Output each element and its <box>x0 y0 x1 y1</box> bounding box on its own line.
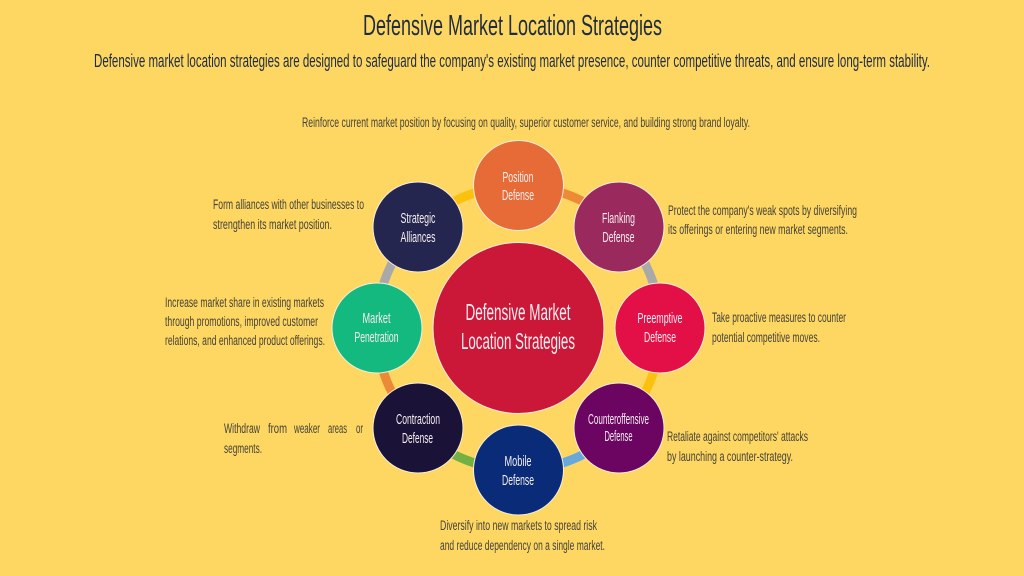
text: Market Penetration description: through promotions, improved customer <box>165 314 318 329</box>
node: Preemptive Defense: Preemptive <box>638 311 682 327</box>
text: Contraction Defense description <box>224 421 363 456</box>
node: Preemptive Defense: Defense <box>644 330 676 346</box>
text: Preemptive Defense description: potential competitive moves. <box>712 330 820 345</box>
node: Market Penetration <box>332 283 422 373</box>
node: Strategic Alliances <box>373 182 463 272</box>
node: Strategic Alliances: Alliances <box>400 230 436 246</box>
text: Contraction Defense description: segments. <box>224 441 262 456</box>
node: Position Defense: Position <box>502 170 534 186</box>
text: Flanking Defense description <box>668 203 857 237</box>
text: Position Defense description: Reinforce current market position by focusing on quality, superior customer service, and building strong brand loyalty. <box>302 115 750 130</box>
text: Counteroffensive Defense description <box>667 429 808 464</box>
text: Counteroffensive Defense description: Retaliate against competitors' attacks <box>667 429 808 444</box>
text: Mobile Defense description <box>440 518 605 553</box>
node: Preemptive Defense <box>615 283 705 373</box>
text: Strategic Alliances description <box>213 197 364 232</box>
text: Preemptive Defense description <box>712 310 846 345</box>
text: Contraction Defense description: areas <box>328 421 347 436</box>
node: Mobile Defense: Mobile <box>504 454 532 470</box>
text: Market Penetration description: Increase market share in existing markets <box>165 295 324 310</box>
node: Contraction Defense: Contraction <box>396 412 440 428</box>
text: Contraction Defense description: Withdraw <box>224 421 260 436</box>
text: Contraction Defense description: or <box>356 421 363 436</box>
text: Flanking Defense description: its offerings or entering new market segments. <box>668 222 848 237</box>
node: Flanking Defense: Flanking <box>602 211 635 227</box>
text: Counteroffensive Defense description: by launching a counter-strategy. <box>667 449 793 464</box>
text: Market Penetration description <box>165 295 325 348</box>
node: Contraction Defense <box>373 383 463 473</box>
text: Flanking Defense description: Protect the company's weak spots by diversifying <box>668 203 857 218</box>
connector ring segments <box>376 186 661 470</box>
node: Flanking Defense: Defense <box>602 230 634 246</box>
node: Strategic Alliances: Strategic <box>400 211 436 227</box>
node: Counteroffensive Defense: Defense <box>604 429 632 445</box>
text: Preemptive Defense description: Take proactive measures to counter <box>712 310 846 325</box>
text: Market Penetration description: relations, and enhanced product offerings. <box>165 333 325 348</box>
title: Defensive Market Location Strategies <box>363 10 662 42</box>
node: Position Defense <box>474 140 564 230</box>
text: Strategic Alliances description: Form alliances with other businesses to <box>213 197 364 212</box>
node: Market Penetration: Penetration <box>354 330 398 346</box>
text: Contraction Defense description: weaker <box>293 421 320 436</box>
text: Mobile Defense description: and reduce dependency on a single market. <box>440 538 605 553</box>
central circle: Defensive Market <box>466 299 571 325</box>
text: Mobile Defense description: Diversify into new markets to spread risk <box>440 518 597 533</box>
node: Mobile Defense <box>474 425 564 515</box>
central circle <box>433 242 604 414</box>
node: Contraction Defense: Defense <box>402 431 433 447</box>
text: Contraction Defense description: from <box>268 421 287 436</box>
node: Counteroffensive Defense: Counteroffensive <box>588 412 649 428</box>
node: Flanking Defense <box>574 182 664 272</box>
node: Mobile Defense: Defense <box>502 473 534 489</box>
node: Counteroffensive Defense <box>574 383 664 473</box>
text: Strategic Alliances description: strengthen its market position. <box>213 217 332 232</box>
central circle: Location Strategies <box>461 328 575 354</box>
node: Position Defense: Defense <box>502 188 534 204</box>
node: Market Penetration: Market <box>362 311 390 327</box>
